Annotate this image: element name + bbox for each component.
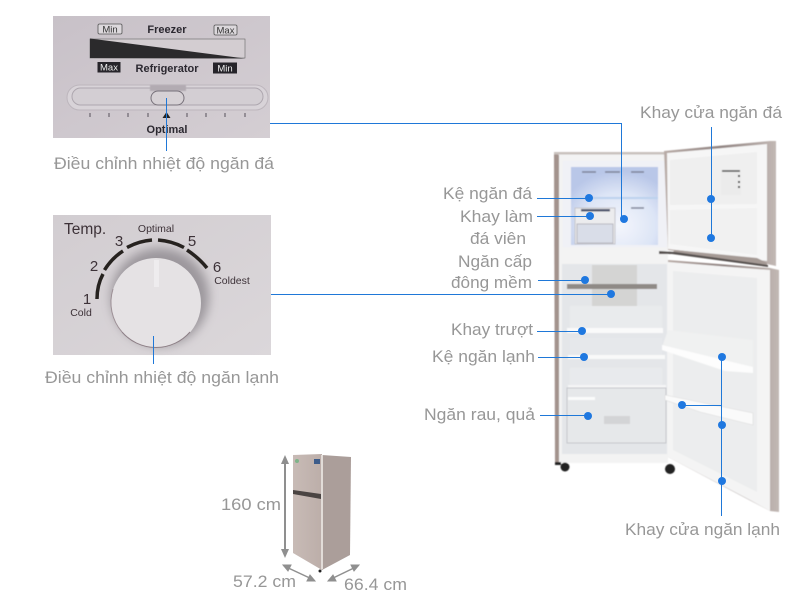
callout: ice tray (537, 212, 594, 220)
text: fridge control label: Điều chỉnh nhiệt độ ngăn lạnh (45, 369, 279, 387)
fridge shelf (568, 338, 665, 359)
text: freezer door tray: Khay cửa ngăn đá (640, 104, 783, 122)
text: ice tray: Khay làm (460, 208, 533, 226)
callout: fridge door trays (678, 353, 726, 516)
optimal label: Optimal (147, 124, 187, 136)
refrigerator heading: Refrigerator (136, 63, 199, 75)
marker: freezer control (620, 215, 628, 223)
text: fridge shelf: Kệ ngăn lạnh (432, 348, 535, 366)
callout: soft freeze upper (538, 276, 589, 284)
freezer door (659, 141, 776, 267)
callout: freezer shelf (537, 194, 593, 202)
slider tick marks (90, 113, 245, 117)
dial labels: Cold (70, 307, 92, 319)
marker: soft freeze lower (607, 290, 615, 298)
freezer max tag: Max (217, 26, 235, 36)
dial (111, 258, 201, 348)
callout: fridge control label line (152, 336, 154, 364)
main refrigerator photo (554, 141, 779, 512)
panel: refrigerator control (53, 215, 271, 355)
freezer heading: Freezer (147, 24, 187, 36)
text: soft freeze (451, 253, 532, 292)
text: ice tray: đá viên (470, 230, 526, 248)
dial labels: 6 (213, 259, 221, 276)
dial labels: 5 (188, 233, 196, 250)
refrigerator max tag: Max (100, 62, 118, 74)
slider (67, 85, 268, 110)
cabinet (554, 152, 668, 463)
text: ice tray (460, 208, 533, 248)
fridge compartment (562, 264, 667, 454)
dial labels: Temp. (64, 221, 106, 238)
ice tray (575, 208, 615, 244)
text: sliding tray: Khay trượt (451, 321, 533, 339)
dial labels: 3 (115, 233, 123, 250)
callout: freezer control line (270, 124, 622, 219)
vegetable drawer (567, 388, 666, 443)
freezer compartment (563, 161, 667, 247)
dial labels: Optimal (138, 223, 174, 235)
text: soft freeze: đông mềm (451, 274, 532, 292)
small refrigerator dimensions (221, 454, 407, 594)
dial labels: 2 (90, 258, 98, 275)
refrigerator door (662, 260, 779, 512)
lower shelf (568, 368, 666, 388)
callout: freezer door tray (707, 127, 715, 242)
refrigerator min tag: Min (217, 64, 233, 74)
mini fridge (293, 454, 351, 572)
optimal marker (162, 112, 170, 118)
text: vegetable drawer: Ngăn rau, quả (424, 406, 536, 424)
refrigerator min tag (213, 62, 237, 74)
callout: fridge control line (271, 294, 611, 296)
dial labels: Coldest (214, 275, 250, 287)
panel: freezer control (53, 16, 270, 138)
temperature wedge (90, 38, 245, 58)
text: depth: 66.4 cm (344, 576, 407, 594)
cabinet feet (555, 462, 675, 474)
callout: sliding tray (537, 327, 586, 335)
temperature arc (97, 240, 207, 299)
callout: fridge shelf (538, 353, 588, 361)
arrow: depth (328, 565, 359, 581)
freezer min tag: Min (102, 24, 118, 36)
text: width: 57.2 cm (233, 573, 296, 591)
callout: freezer control label line (166, 98, 168, 151)
arrow: width (283, 565, 315, 581)
text: height: 160 cm (221, 496, 281, 514)
text: freezer shelf: Kệ ngăn đá (443, 185, 533, 203)
text: fridge door tray: Khay cửa ngăn lạnh (625, 521, 780, 539)
freezer min tag (98, 24, 122, 36)
dial labels: 1 (83, 291, 91, 308)
callout: vegetable drawer (540, 412, 592, 420)
text: freezer control label: Điều chỉnh nhiệt độ ngăn đá (54, 155, 275, 173)
dial shadow (111, 248, 209, 346)
dial labels (64, 221, 250, 319)
arrow: height (281, 455, 289, 558)
sliding tray (567, 328, 663, 333)
text: soft freeze: Ngăn cấp (458, 253, 532, 271)
